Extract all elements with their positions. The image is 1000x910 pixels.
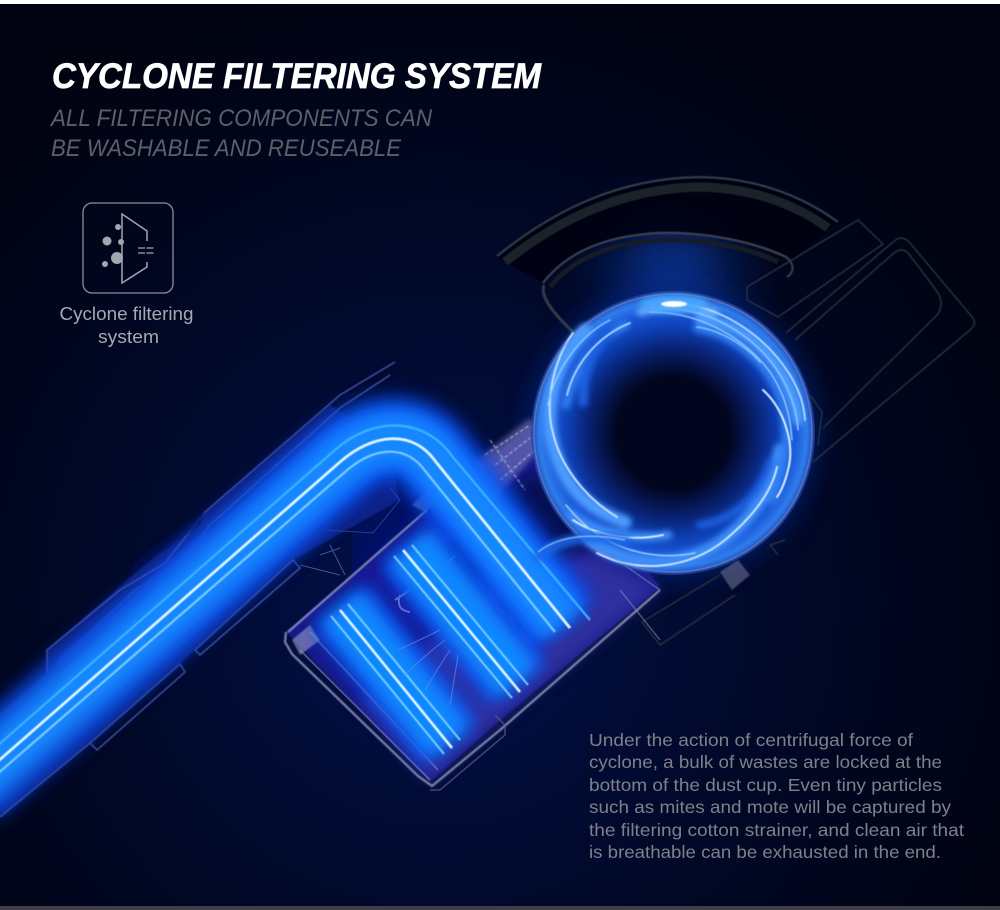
ambient glow xyxy=(400,220,819,640)
icon: cyclone filter xyxy=(83,203,173,293)
description paragraph xyxy=(589,730,964,862)
cyclone highlight xyxy=(640,295,708,313)
top page edge xyxy=(0,0,1000,4)
air tube: main duct xyxy=(0,426,590,789)
icon caption xyxy=(60,304,194,347)
connector block beside cyclone xyxy=(473,418,660,640)
icon caption: Cyclone filtering xyxy=(60,304,194,324)
tube housing outline xyxy=(0,362,395,817)
cyclone soft swirl bands xyxy=(550,308,798,562)
bottom page edge xyxy=(0,906,1000,910)
description paragraph: cyclone, a bulk of wastes are locked at the xyxy=(589,752,942,772)
cyclone ring xyxy=(531,291,815,575)
icon caption: system xyxy=(98,327,159,347)
subtitle xyxy=(49,105,432,162)
air tube: middle branch xyxy=(394,545,528,698)
subtitle: BE WASHABLE AND REUSEABLE xyxy=(51,135,402,162)
subtitle: ALL FILTERING COMPONENTS CAN xyxy=(49,105,432,132)
description paragraph: bottom of the dust cup. Even tiny particles xyxy=(589,775,942,795)
tube housing detail blocks xyxy=(55,510,210,672)
battery housing outline xyxy=(642,220,974,645)
description paragraph: is breathable can be exhausted in the end. xyxy=(589,842,941,862)
cyclone inlet xyxy=(535,536,630,560)
cyclone fine swirl lines xyxy=(548,303,805,566)
description paragraph: the filtering cotton strainer, and clean air that xyxy=(589,820,964,840)
dust cup mesh detail xyxy=(395,537,537,637)
description paragraph: such as mites and mote will be captured by xyxy=(589,797,951,817)
description paragraph: Under the action of centrifugal force of xyxy=(589,730,913,750)
tube housing body xyxy=(0,405,400,817)
cup fan lines xyxy=(398,630,458,705)
lower fitting near cyclone xyxy=(720,560,750,590)
vacuum handle outline xyxy=(497,177,838,332)
air tube: lower branch xyxy=(331,604,460,754)
dust cup body xyxy=(285,420,660,790)
title: CYCLONE FILTERING SYSTEM xyxy=(52,57,542,96)
